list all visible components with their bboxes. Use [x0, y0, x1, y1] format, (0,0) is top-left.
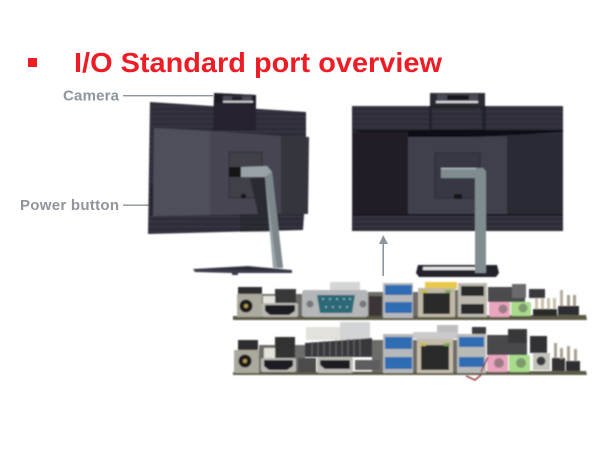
screen frame — [148, 102, 306, 234]
dual USB — [458, 283, 487, 317]
header block — [472, 327, 547, 355]
filler components — [262, 290, 458, 316]
mount plate — [229, 152, 262, 198]
shadow wedge — [353, 130, 563, 137]
stand arm — [441, 168, 486, 273]
rear panel — [353, 132, 562, 216]
USB ports — [383, 334, 413, 373]
rear panel — [153, 128, 309, 216]
pin headers — [533, 290, 579, 316]
title text: I/O Standard port overview — [74, 47, 442, 78]
circuit board — [233, 315, 587, 320]
bullet — [28, 58, 37, 67]
LAN port — [418, 282, 457, 317]
stand shadow — [250, 177, 270, 214]
monitor: rear three-quarter view — [148, 93, 309, 275]
title — [28, 47, 442, 78]
pink audio jack — [489, 302, 510, 317]
display port — [298, 357, 380, 373]
stand base — [193, 266, 292, 275]
components — [369, 296, 382, 316]
serial port — [302, 282, 368, 317]
callout: camera: Camera — [63, 88, 120, 104]
callout: power button: Power button — [20, 197, 119, 214]
heatsink — [305, 322, 372, 357]
pink audio jack — [487, 355, 508, 372]
circuit board — [233, 371, 587, 375]
USB ports — [383, 283, 413, 318]
camera module — [213, 93, 256, 131]
blue USB stack — [457, 334, 486, 373]
HDMI port — [262, 289, 298, 317]
header block — [488, 284, 545, 302]
arrow: up to monitor — [379, 235, 388, 276]
red wire — [466, 357, 488, 380]
camera module — [429, 93, 486, 130]
side buttons — [151, 185, 153, 215]
pin headers — [552, 343, 580, 371]
LAN port — [413, 325, 458, 373]
DC jack — [234, 340, 259, 373]
green audio jack — [509, 355, 530, 372]
push button — [533, 353, 550, 370]
monitor: straight rear view — [352, 93, 563, 277]
green audio jack — [511, 302, 531, 316]
board: upper I/O ports — [233, 282, 587, 320]
screen frame — [352, 106, 563, 231]
board: lower I/O ports — [233, 322, 587, 380]
stand arm — [240, 166, 283, 268]
filler components — [259, 340, 457, 372]
stand base — [416, 265, 499, 277]
mount plate — [435, 153, 480, 198]
DC jack — [237, 287, 262, 317]
HDMI port — [261, 337, 296, 372]
